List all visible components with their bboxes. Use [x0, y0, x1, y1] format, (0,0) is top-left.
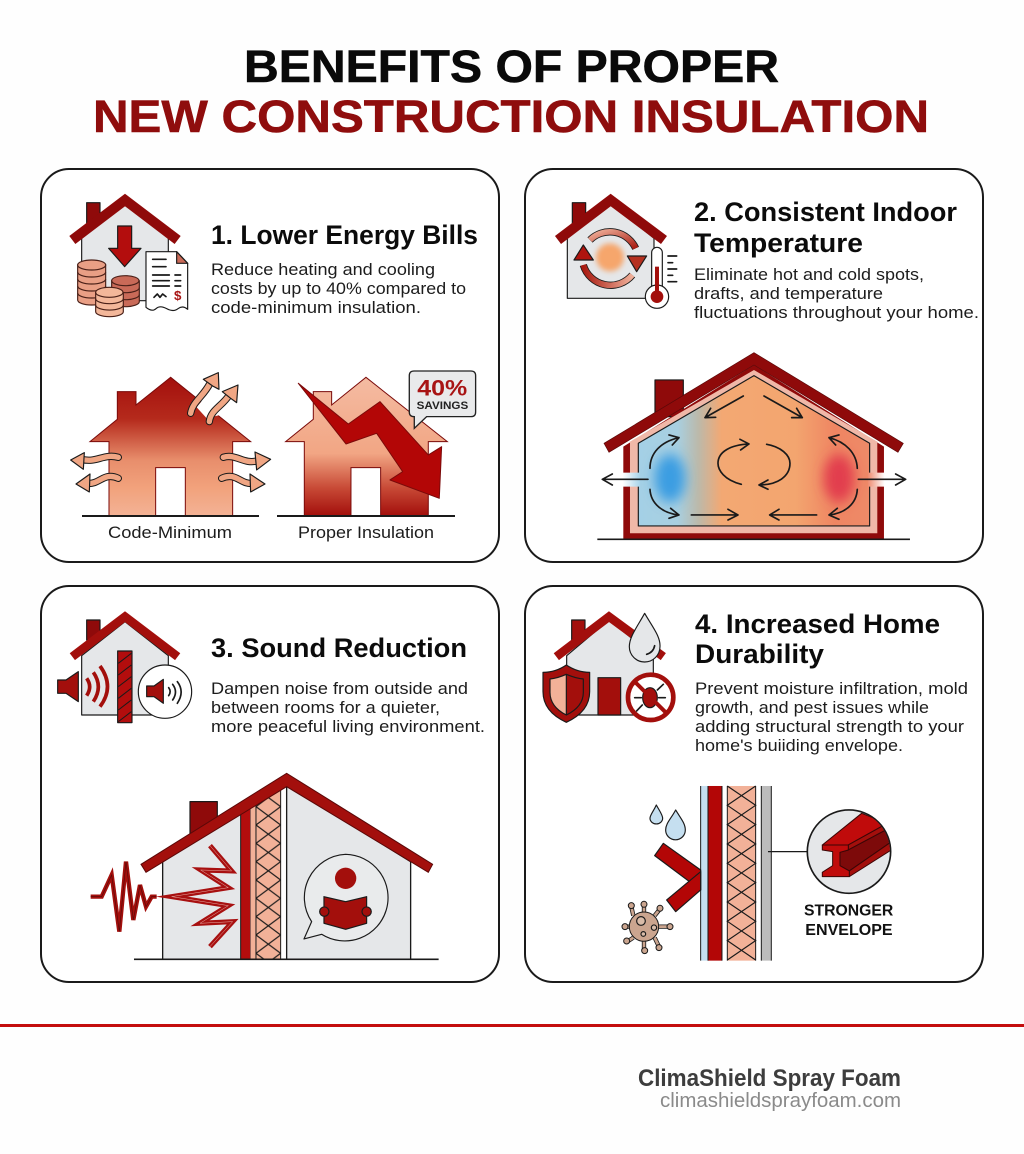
house: proper insulation with savings arrow [286, 377, 447, 516]
diagram: wall section with moisture and mold blocked: ENVELOPE [805, 922, 893, 939]
blocked arrows [655, 843, 701, 912]
heading: increased home durability: 4. Increased Home [695, 609, 940, 639]
moisture drops [650, 805, 685, 840]
title: BENEFITS OF PROPER [244, 41, 779, 92]
body text: sound reduction: between rooms for a quieter, [211, 698, 440, 717]
diagram: wall section with moisture and mold blocked: STRONGER [804, 903, 893, 920]
body text: sound reduction: Dampen noise from outside and [211, 679, 468, 698]
footer rule [0, 1024, 1024, 1027]
sound wave [91, 862, 157, 932]
callout: steel beam [807, 810, 894, 893]
diagram: house with insulated wall and quiet reader [91, 773, 439, 959]
panel: lower energy bills [41, 169, 499, 562]
label: code-minimum: Code-Minimum [108, 524, 232, 542]
callout: 40% savings: 40% [417, 376, 467, 401]
body text: durability: growth, and pest issues while [695, 698, 929, 717]
footer brand [638, 1065, 901, 1112]
footer brand: ClimaShield Spray Foam [638, 1065, 901, 1092]
title: NEW CONSTRUCTION INSULATION [93, 91, 929, 142]
body text: lower energy bills: Reduce heating and cooling [211, 260, 435, 279]
diagram: house with hot and cold airflow [597, 353, 910, 539]
heading: consistent indoor temperature: Temperature [694, 228, 863, 258]
icon: house with coins and bill: $ [174, 288, 182, 303]
diagram: wall section with moisture and mold blocked [622, 786, 894, 961]
heading: lower energy bills: 1. Lower Energy Bills [211, 220, 478, 250]
mold spore [622, 901, 673, 954]
panel: increased home durability [525, 586, 983, 982]
heading: increased home durability [695, 609, 940, 669]
footer brand: climashieldsprayfoam.com [660, 1090, 901, 1112]
title [93, 41, 929, 142]
body text: consistent temperature [694, 265, 979, 322]
heading: increased home durability: Durability [695, 639, 824, 669]
body text: lower energy bills: costs by up to 40% compared to [211, 279, 466, 298]
body text: sound reduction [211, 679, 485, 736]
heading: consistent indoor temperature [694, 197, 957, 258]
icon: house with shield, drop and pest [543, 613, 673, 722]
callout: 40% savings [409, 371, 476, 428]
house: code-minimum with heat loss [71, 373, 271, 516]
body text: consistent temperature: fluctuations throughout your home. [694, 303, 979, 322]
body text: consistent temperature: drafts, and temperature [694, 284, 883, 303]
ground lines [82, 515, 455, 517]
body text: durability: adding structural strength to your [695, 717, 964, 736]
icon: house with coins and bill [72, 200, 188, 317]
body text: sound reduction: more peaceful living environment. [211, 717, 485, 736]
callout: 40% savings: SAVINGS [417, 400, 468, 412]
icon: house with speaker and sound barrier [58, 617, 192, 723]
panel: consistent indoor temperature [525, 169, 983, 562]
big downward arrow [298, 383, 442, 498]
body text: durability: Prevent moisture infiltration, mold [695, 679, 968, 698]
sound impact zigzag [172, 846, 233, 947]
icon: house with circulation and thermometer [558, 200, 677, 308]
heading: sound reduction: 3. Sound Reduction [211, 633, 467, 663]
body text: lower energy bills [211, 260, 466, 317]
body text: consistent temperature: Eliminate hot and cold spots, [694, 265, 924, 284]
panel: sound reduction [41, 586, 499, 982]
heading: consistent indoor temperature: 2. Consistent Indoor [694, 197, 957, 227]
body text: durability: home's buiiding envelope. [695, 736, 903, 755]
body text: durability [695, 679, 968, 755]
body text: lower energy bills: code-minimum insulation. [211, 298, 421, 317]
label: proper insulation: Proper Insulation [298, 524, 434, 542]
